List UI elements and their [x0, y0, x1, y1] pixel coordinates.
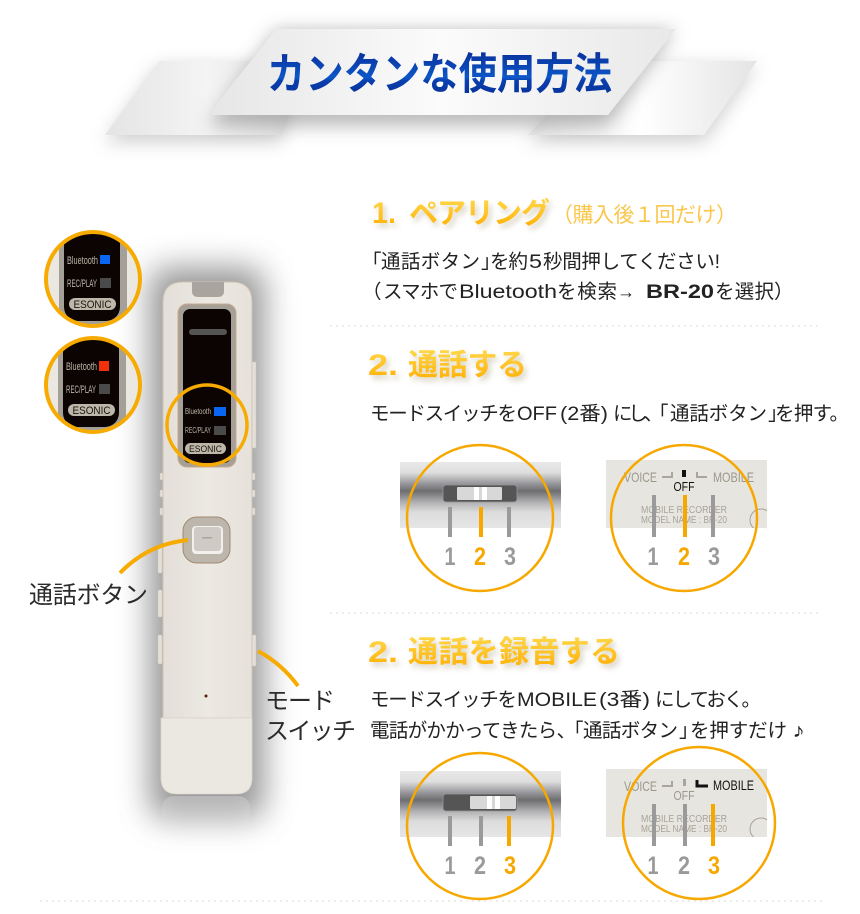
section 1 text: （: [362, 281, 382, 303]
section 2 text: (2番): [560, 403, 608, 425]
logo: ESONIC: ESONIC: [189, 444, 222, 454]
label: mode switch: スイッチ: [265, 718, 356, 745]
callout: Bluetooth blue: REC/PLAY: [67, 278, 97, 290]
section 1 text: 」: [481, 251, 501, 273]
figure: slider position 2: 3: [504, 543, 516, 571]
figure: label position 2: 2: [678, 543, 690, 571]
section 1 text: 5: [529, 251, 542, 273]
figure: label position 2: OFF: [674, 479, 695, 494]
section 1 text: スマホで: [383, 281, 458, 303]
section 3 text: MOBILE: [517, 689, 597, 711]
figure: label position 3: 1: [648, 852, 659, 880]
arrow: mode switch: [258, 651, 298, 686]
figure: label position 2: MODEL NAME : BR-20: [641, 514, 727, 526]
section 3 text: (3番): [599, 689, 650, 711]
figure: label position 3: OFF: [674, 788, 695, 803]
section 1 heading: ペアリング: [412, 201, 553, 234]
device: recorder: [150, 268, 264, 846]
callout: Bluetooth red: ESONIC: [72, 405, 111, 417]
callout: Bluetooth blue: ESONIC: [74, 299, 112, 311]
indicator: grey: [214, 426, 226, 435]
section 2 heading: 2.: [368, 349, 398, 382]
section 1 heading: [372, 197, 737, 234]
section 2 heading: 通話する: [408, 349, 527, 382]
banner: left ribbon: [105, 61, 310, 142]
call button: [183, 517, 230, 563]
callout: Bluetooth red: Bluetooth: [66, 361, 97, 373]
highlight circle on device: [167, 385, 247, 465]
figure: label position 3: 2: [678, 852, 690, 880]
section 1 text: →: [617, 281, 635, 303]
section 1 text: 「: [362, 251, 382, 273]
figure: slider position 2: 2: [474, 543, 486, 571]
top notch: [192, 282, 224, 297]
mic dot: [204, 694, 208, 698]
section 2 heading: 通話する: [411, 353, 530, 386]
section 1 text: を約: [490, 251, 528, 273]
section 3 text: 通話ボタン: [583, 720, 678, 742]
section 3 heading: 通話を録音する: [408, 636, 620, 669]
side buttons: [158, 362, 256, 666]
callout: Bluetooth blue: [46, 225, 140, 326]
section 3 text: ♪: [792, 720, 805, 742]
figure: label position 3: MODEL NAME : BR-20: [641, 823, 727, 835]
figure: label position 2: 3: [708, 543, 720, 571]
label: mode switch: モード: [265, 688, 335, 715]
screen frame: [178, 304, 236, 467]
section 3 text: にしておく。: [655, 689, 761, 711]
section 2 text: OFF: [517, 403, 557, 425]
callout: Bluetooth red: REC/PLAY: [66, 384, 96, 396]
screen label: Bluetooth: Bluetooth: [185, 406, 211, 416]
figure: label position 2: 1: [648, 543, 659, 571]
section 1 heading: 1.: [375, 201, 399, 234]
section 2 text: にし、: [613, 403, 663, 425]
section 2 heading: 2.: [371, 353, 401, 386]
figure: label position 3: VOICE: [624, 778, 657, 794]
banner: right ribbon: [528, 61, 757, 142]
section 2 text: 」: [768, 403, 788, 425]
section 3 text: 電話がかかってきたら、: [370, 720, 576, 742]
section 2 text: 通話ボタン: [670, 403, 767, 425]
section 3 text: 」: [679, 720, 699, 742]
section 3 text: モードスイッチを: [370, 689, 517, 711]
figure: label position 2: MOBILE: [713, 469, 754, 485]
figure: label position 2: MOBILE RECORDER: [641, 504, 727, 516]
section 3 heading: 2.: [371, 640, 401, 673]
figure: slider position 2: [400, 445, 561, 591]
figure: label position 3: 3: [708, 852, 720, 880]
section 1 heading: （購入後１回だけ）: [552, 204, 737, 227]
section 2 heading: [368, 349, 530, 386]
figure: label position 2: [606, 445, 772, 591]
figure: label position 2: VOICE: [624, 469, 657, 485]
section 1 text: を検索: [557, 281, 617, 303]
section 1 text: 通話ボタン: [381, 251, 480, 273]
section 1 text: を選択: [715, 281, 774, 303]
speaker grille: [189, 329, 227, 335]
figure: label position 3: MOBILE RECORDER: [641, 813, 727, 825]
section 1 text: 秒間押してください!: [543, 251, 720, 273]
callout: Bluetooth blue: Bluetooth: [67, 255, 98, 267]
section 2 text: を押す。: [775, 403, 849, 425]
title text: カンタンな使用方法: [267, 51, 612, 99]
section 2 text: モードスイッチを: [370, 403, 517, 425]
figure: slider position 3: [400, 753, 561, 899]
figure: slider position 2: 1: [444, 543, 456, 571]
arrow: call button: [120, 540, 188, 573]
section 1 text: [362, 251, 794, 303]
figure: label position 3: [606, 747, 775, 899]
banner: centre ribbon: [208, 29, 676, 126]
label: mode switch: [265, 688, 356, 745]
figure: label position 3: MOBILE: [713, 777, 754, 793]
section 1 heading: ペアリング: [409, 197, 550, 230]
device reflection: [162, 796, 250, 846]
device cap: [161, 718, 252, 794]
callout: Bluetooth red: [46, 330, 140, 432]
screen label: REC/PLAY: REC/PLAY: [185, 425, 211, 435]
indicator: blue: [214, 407, 226, 416]
section 1 text: BR-20: [646, 281, 714, 303]
label: call button: 通話ボタン: [29, 582, 148, 609]
figure: slider position 3: 1: [444, 852, 456, 880]
screen: [183, 309, 231, 463]
section 2 text: [370, 403, 849, 425]
section 3 text: 「: [564, 720, 584, 742]
section 1 text: Bluetooth: [459, 281, 557, 303]
section 2 text: 「: [649, 403, 669, 425]
section 1 heading: 1.: [372, 197, 396, 230]
figure: slider position 3: 2: [474, 852, 486, 880]
section 3 heading: 2.: [368, 636, 398, 669]
section 3 text: [370, 689, 805, 742]
device shadow: [150, 268, 264, 818]
section 3 text: を押すだけ: [690, 720, 787, 742]
section 3 heading: 通話を録音する: [411, 640, 623, 673]
section 1 text: ）: [774, 281, 794, 303]
device body: [163, 282, 252, 718]
figure: slider position 3: 3: [504, 852, 516, 880]
title banner: [105, 29, 757, 142]
